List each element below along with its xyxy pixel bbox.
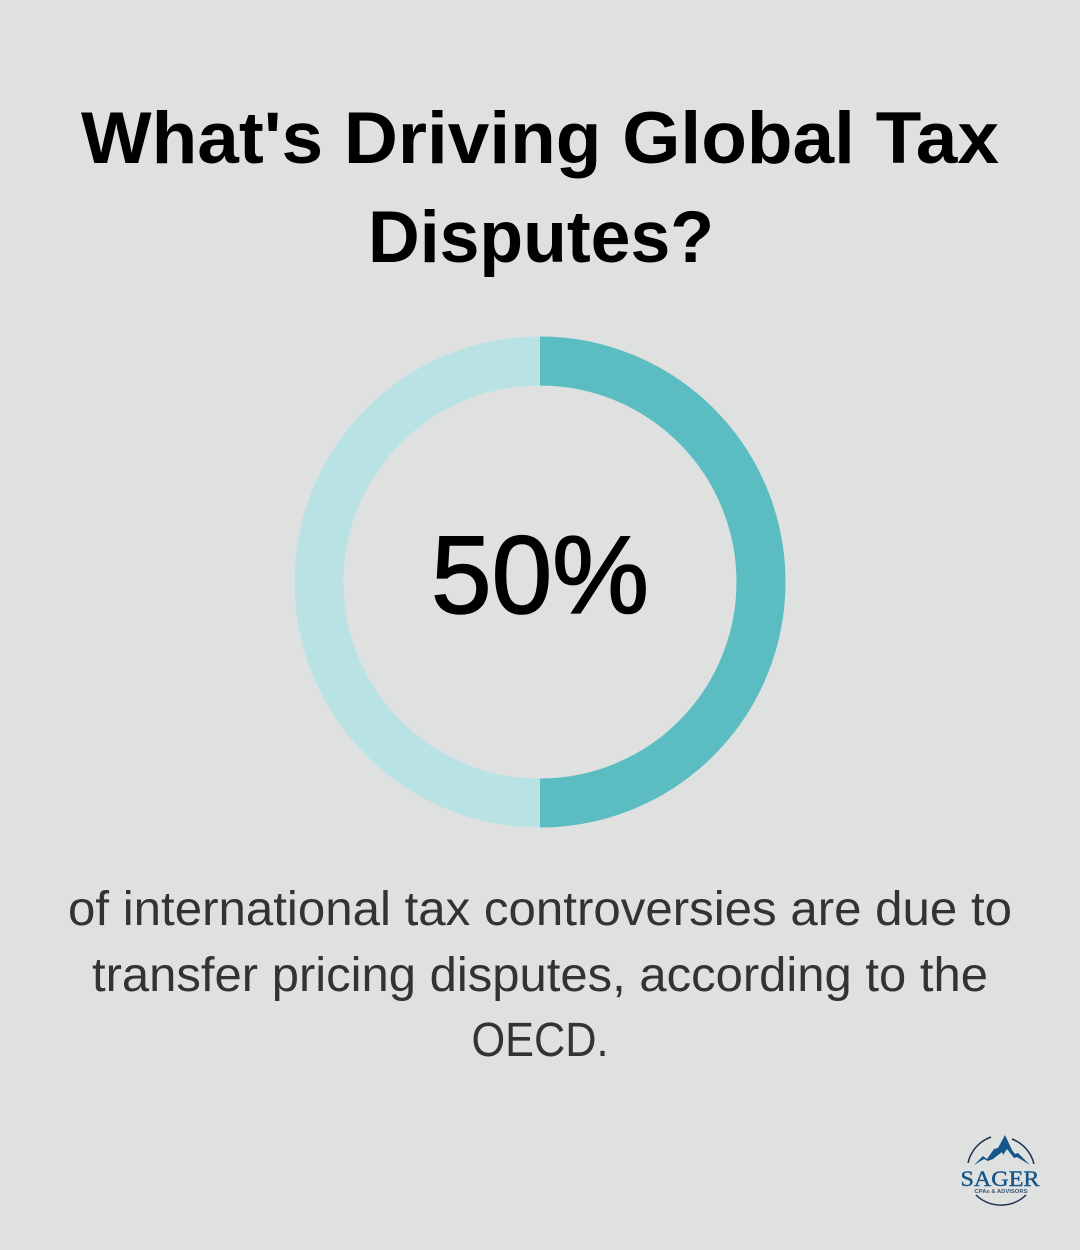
donut value: 50% [431, 514, 649, 637]
logo: Sager CPAs & Advisors: CPAs & ADVISORS [974, 1189, 1028, 1195]
title: What's Driving Global Tax [81, 98, 999, 179]
description text: OECD. [472, 1014, 608, 1067]
title [81, 98, 999, 278]
description text: transfer pricing disputes, according to the [92, 949, 988, 1002]
description text [68, 883, 1012, 1067]
description text: of international tax controversies are due to [68, 883, 1012, 936]
logo: Sager CPAs & Advisors: SAGER [960, 1166, 1040, 1191]
logo: Sager CPAs & Advisors [960, 1135, 1040, 1205]
donut chart: 50% [319, 361, 761, 803]
title: Disputes? [368, 197, 714, 278]
